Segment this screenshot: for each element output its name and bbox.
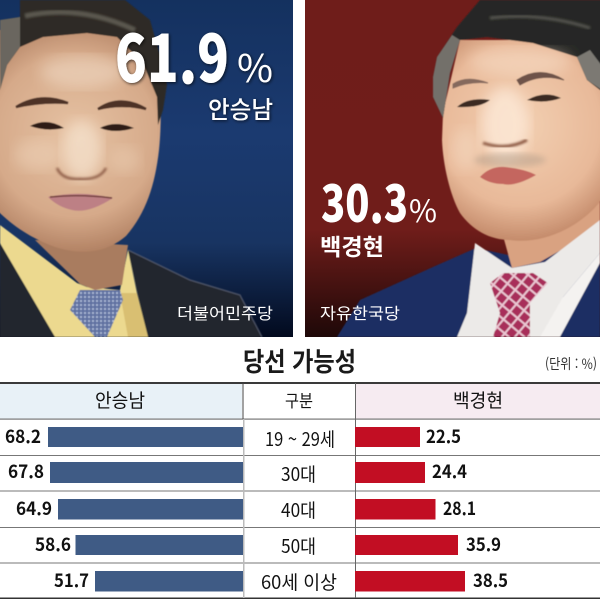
- big percentage 61.9%: 61.9: [115, 7, 229, 101]
- big percentage 30.3%: 30.3: [321, 163, 408, 237]
- row: 19~29세: 19 ~ 29세: [265, 425, 335, 452]
- candidate name 안승남: 안승남: [208, 90, 273, 125]
- row: 30대: 30대: [281, 460, 316, 487]
- row: 60세 이상: 38.5: [473, 567, 508, 593]
- row: 50대: 50대: [281, 532, 316, 559]
- photo: 백경현 portrait: [337, 0, 600, 337]
- big percentage 61.9%: [116, 32, 274, 87]
- row: 60세 이상: 51.7: [54, 567, 89, 593]
- photo: 안승남 portrait: [0, 0, 262, 337]
- candidate name 백경현: 백경현: [320, 228, 384, 262]
- row: 40대: [16, 495, 476, 523]
- big percentage 30.3%: %: [409, 186, 437, 231]
- row: 19~29세: [5, 423, 461, 452]
- row: 60세 이상: [54, 567, 508, 595]
- row: 30대: [8, 458, 467, 487]
- row: 40대: 40대: [281, 496, 316, 523]
- header: 구분 column: 구분: [285, 387, 313, 412]
- chart title: 당선 가능성: [243, 342, 356, 379]
- panel: candidate 안승남: [0, 0, 293, 337]
- big percentage 30.3%: [322, 184, 436, 224]
- row: 50대: 35.9: [466, 531, 501, 557]
- panel: candidate 백경현: [305, 0, 600, 337]
- header: 백경현 column: 백경현: [453, 386, 503, 413]
- big percentage 61.9%: %: [237, 38, 273, 93]
- row: 30대: 67.8: [8, 458, 44, 484]
- row: 19~29세: 68.2: [5, 423, 41, 449]
- row: 50대: [35, 531, 501, 559]
- row: 50대: 58.6: [35, 531, 71, 557]
- row: 19~29세: 22.5: [426, 423, 461, 449]
- row: 60세 이상: 60세 이상: [261, 568, 337, 595]
- header: 안승남 column: [0, 383, 242, 419]
- row: 40대: 64.9: [16, 495, 52, 521]
- header: 안승남 column: 안승남: [95, 386, 145, 413]
- header: 백경현 column: [355, 383, 600, 419]
- party label 자유한국당: 자유한국당: [320, 300, 400, 324]
- row: 30대: 24.4: [432, 458, 467, 484]
- party label 더불어민주당: 더불어민주당: [177, 300, 273, 324]
- row: 40대: 28.1: [443, 495, 476, 521]
- table: 당선 가능성 by age group: [0, 382, 600, 599]
